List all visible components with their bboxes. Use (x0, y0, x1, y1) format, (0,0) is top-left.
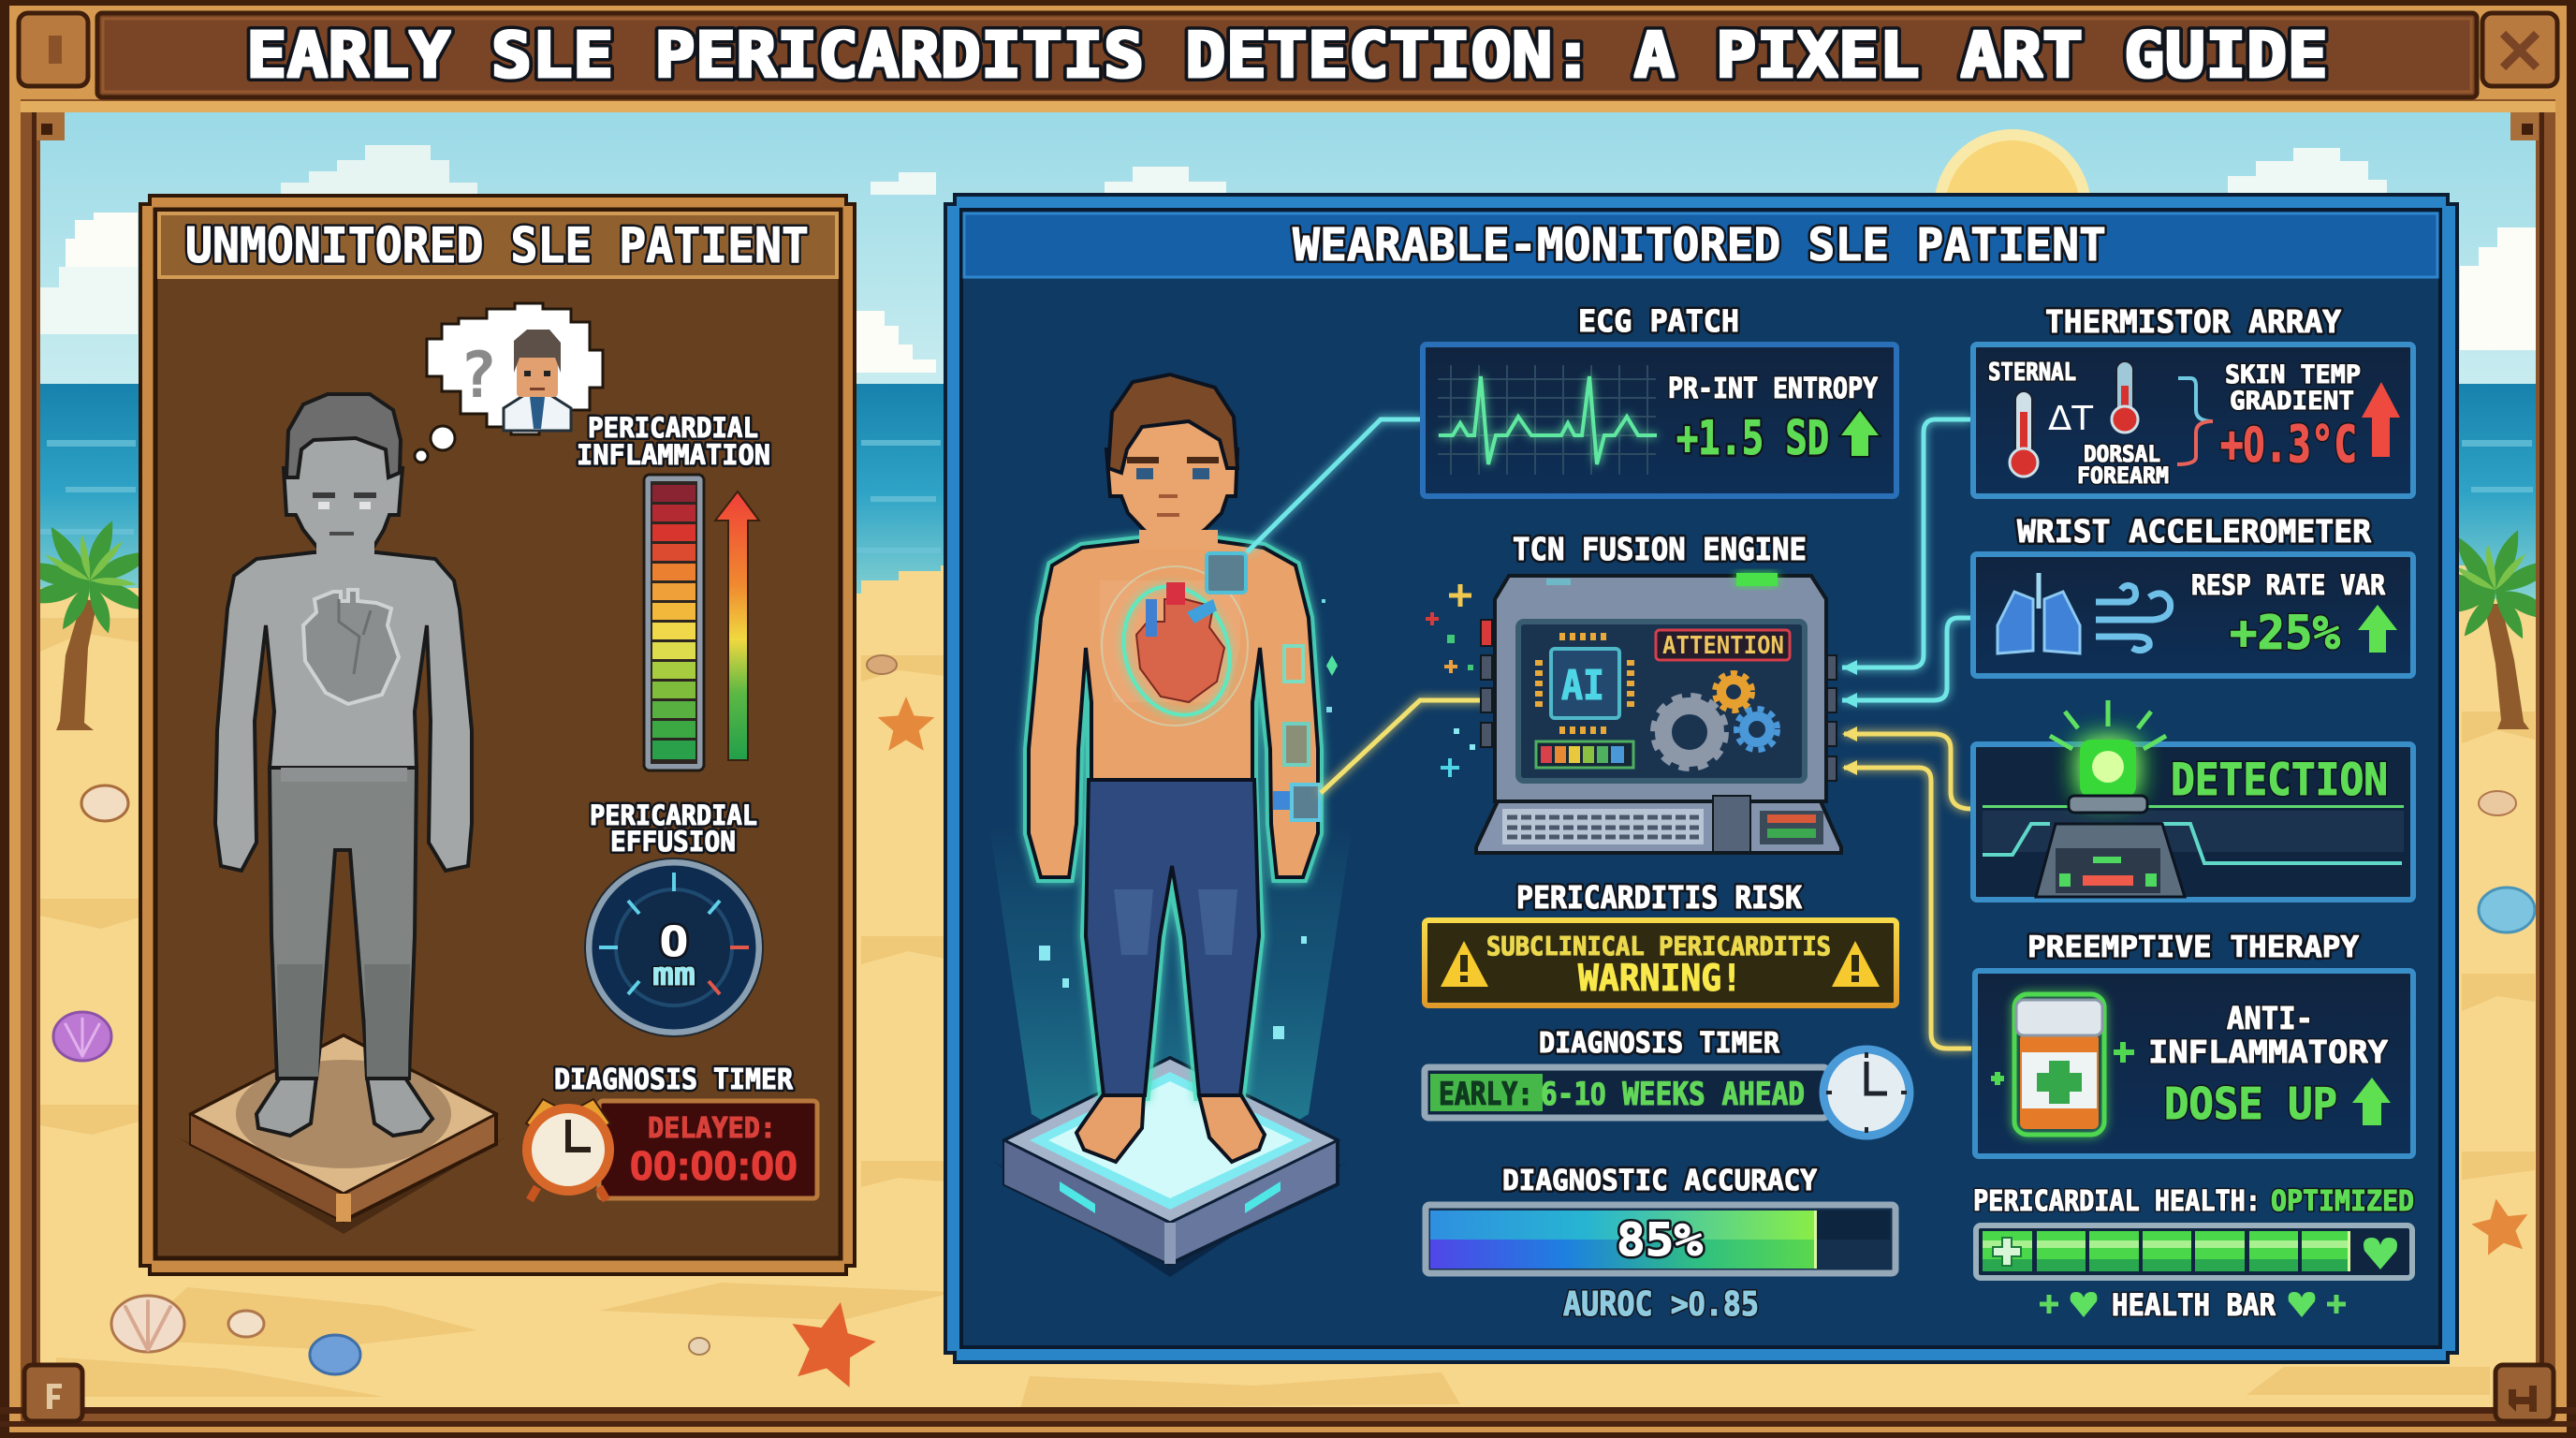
connector: accelerometer to engine (1842, 618, 1971, 700)
platform: glowing (992, 1058, 1348, 1277)
sand ripples (40, 618, 2535, 1408)
glowing outline (1029, 541, 1318, 1095)
ECG trace (1439, 376, 1657, 464)
button: bottom right (2496, 1365, 2554, 1421)
connector: engine to therapy (1844, 768, 1971, 1049)
head (284, 412, 402, 549)
card: ECG patch: +1.5 SD (1676, 411, 1829, 465)
heading: wearable (964, 213, 2437, 277)
starfish (782, 697, 2533, 1390)
bar: early diagnosis timer (1425, 1067, 1827, 1118)
label: diagnosis timer early: DIAGNOSIS TIMER (1539, 1027, 1780, 1060)
label: ECG patch: ECG PATCH (1578, 303, 1739, 339)
label: diagnostic accuracy: DIAGNOSTIC ACCURACY (1502, 1165, 1817, 1197)
card: thermistor array (1973, 345, 2413, 496)
card: preemptive therapy: INFLAMMATORY (2148, 1034, 2388, 1070)
label: health bar caption (2040, 1287, 2346, 1323)
sensor: forearm (1284, 724, 1309, 765)
sparkles near engine (1426, 584, 1475, 777)
arrow: up green (2352, 1078, 2391, 1125)
card: thermistor array: GRADIENT (2230, 387, 2354, 416)
title bar (97, 13, 2477, 97)
icon: warning triangle left (1441, 941, 1488, 987)
card: warning (1425, 920, 1896, 1005)
ECG grid (1438, 365, 1656, 475)
panel: unmonitored patient (140, 196, 855, 1274)
bar: health bar (1976, 1225, 2412, 1278)
heart: glowing (1102, 566, 1248, 729)
icon: AI computer engine (1476, 573, 1841, 853)
figure: grey patient (215, 394, 472, 1136)
sun (1934, 129, 2091, 286)
shells (53, 655, 2535, 1374)
gauge: effusion 0 mm: 0 (660, 917, 688, 965)
gauge: effusion 0 mm: mm (652, 956, 695, 993)
trousers (1086, 780, 1259, 1095)
arrow: up green (2358, 605, 2397, 653)
card: preemptive therapy (1975, 971, 2413, 1156)
card: warning: WARNING! (1578, 958, 1742, 1000)
icon: medicine bottle (2014, 994, 2104, 1135)
trousers (270, 768, 417, 1078)
label: pericardial inflammation: PERICARDIAL (588, 412, 758, 444)
icon: heart (2364, 1238, 2397, 1269)
icon: doctor (504, 330, 571, 431)
icon: clock (1823, 1049, 1910, 1136)
sensor: upper arm (1284, 646, 1303, 682)
sparkles near body (1039, 599, 1338, 1039)
sensor: ECG patch (1207, 553, 1246, 593)
icon: alarm clock (526, 1099, 610, 1200)
icon: lungs (1998, 573, 2080, 653)
label: AUROC: AUROC >0.85 (1563, 1284, 1759, 1324)
label: pericarditis risk: PERICARDITIS RISK (1516, 879, 1802, 916)
timer: delayed readout (599, 1101, 817, 1198)
label: wrist accelerometer: WRIST ACCELEROMETER (2017, 513, 2371, 550)
feet (1076, 1095, 1144, 1162)
label: thermistor array: THERMISTOR ARRAY (2045, 303, 2341, 340)
side ports (1481, 655, 1837, 781)
bar: early diagnosis timer: EARLY: (1439, 1076, 1533, 1113)
arrow: up green (1839, 409, 1881, 457)
label: pericardial inflammation: INFLAMMATION (577, 439, 770, 471)
timer: delayed readout: DELAYED: (648, 1112, 776, 1145)
machine base (2036, 824, 2185, 897)
card: thermistor array: DORSAL (2084, 441, 2160, 467)
label: diagnosis timer delayed: DIAGNOSIS TIMER (554, 1064, 794, 1096)
sparkle plus (1991, 1042, 2134, 1085)
icon: warning triangle right (1832, 941, 1880, 987)
bar: 85 percent accuracy (1426, 1205, 1895, 1273)
button: bottom left (24, 1365, 82, 1421)
heart: grey (303, 590, 399, 704)
label: TCN fusion engine: TCN FUSION ENGINE (1513, 531, 1807, 567)
card: ECG patch: PR-INT ENTROPY (1668, 373, 1878, 405)
inflammation meter (644, 475, 704, 770)
status bar (1536, 741, 1633, 768)
card: ECG patch (1423, 345, 1896, 496)
label: preemptive therapy: PREEMPTIVE THERAPY (2027, 931, 2359, 964)
heading: wearable: WEARABLE-MONITORED SLE PATIENT (1293, 219, 2106, 271)
bar: 85 percent accuracy: 85% (1617, 1214, 1703, 1267)
thought bubble (415, 303, 603, 462)
label: pericardial effusion: PERICARDIAL (590, 800, 757, 831)
gauge: effusion 0 mm (585, 858, 763, 1036)
label: pericardial effusion (590, 800, 757, 858)
sensors on body (1207, 553, 1320, 820)
connector: chest to ECG (1247, 419, 1423, 552)
panel: wearable-monitored patient (945, 195, 2457, 1362)
heading: unmonitored: UNMONITORED SLE PATIENT (185, 218, 809, 274)
card: thermistor array: FOREARM (2077, 462, 2169, 489)
button: top left (19, 13, 88, 86)
button: close top right (2482, 13, 2557, 86)
card: wrist accelerometer (1973, 554, 2413, 676)
sea stripes (40, 440, 2533, 553)
card: warning: SUBCLINICAL PERICARDITIS (1486, 931, 1831, 961)
corner notches (37, 112, 2539, 140)
beacon (2080, 740, 2136, 798)
clouds (40, 145, 2536, 373)
connector: thermistor to engine (1842, 419, 1971, 668)
card: preemptive therapy: DOSE UP (2164, 1078, 2337, 1129)
bar: early diagnosis timer: 6-10 WEEKS AHEAD (1541, 1076, 1805, 1113)
figure: monitored patient (1029, 374, 1318, 1162)
card: wrist accelerometer: +25% (2230, 606, 2340, 660)
card: wrist accelerometer: RESP RATE VAR (2191, 569, 2385, 601)
feet (256, 1077, 316, 1136)
palm tree left (15, 517, 157, 730)
label: pericardial health: PERICARDIAL HEALTH: (1973, 1185, 2261, 1218)
question mark: ? (460, 339, 497, 413)
arrow: inflammation rising (715, 492, 759, 760)
torso and arms (215, 552, 472, 871)
arrow: up red (2362, 382, 2400, 457)
torso and arms (1029, 541, 1318, 877)
card: detection (1973, 700, 2413, 900)
label: pericardial health: OPTIMIZED (2271, 1185, 2414, 1218)
connector: engine to detection (1844, 734, 1971, 809)
label: pericardial inflammation (577, 412, 770, 471)
status lamp (1736, 573, 1778, 586)
head (1106, 412, 1237, 537)
gears (1654, 673, 1778, 768)
icon: thermometer sternal (2010, 391, 2038, 477)
palm tree right (2421, 526, 2563, 729)
icon: wind (2096, 585, 2171, 651)
hologram beam (989, 824, 1353, 1198)
timer: delayed readout: 00:00:00 (630, 1143, 798, 1189)
card: thermistor array: ΔT (2048, 400, 2094, 438)
title: EARLY SLE PERICARDITIS DETECTION: A PIXEL ART GUIDE (246, 19, 2328, 92)
label: pericardial effusion: EFFUSION (610, 826, 736, 858)
card: preemptive therapy: ANTI- (2227, 1000, 2313, 1036)
AI chip: AI (1561, 662, 1604, 710)
sensor: wrist band (1273, 785, 1320, 820)
icon: thermometer forearm (2112, 361, 2138, 433)
card: thermistor array: SKIN TEMP (2225, 360, 2361, 389)
AI chip (1539, 637, 1631, 730)
label: health bar caption: HEALTH BAR (2112, 1287, 2276, 1323)
card: thermistor array: STERNAL (1988, 359, 2076, 387)
arrowheads into engine (1842, 660, 1857, 775)
attention tag: ATTENTION (1662, 632, 1784, 660)
beacon rays (2050, 700, 2166, 749)
connector: wrist to engine (1321, 700, 1484, 793)
platform: wooden (178, 1035, 505, 1234)
bracket (2177, 378, 2213, 464)
card: thermistor array: +0.3°C (2220, 415, 2357, 474)
card: detection: DETECTION (2171, 755, 2388, 806)
keyboard base (1476, 801, 1841, 853)
